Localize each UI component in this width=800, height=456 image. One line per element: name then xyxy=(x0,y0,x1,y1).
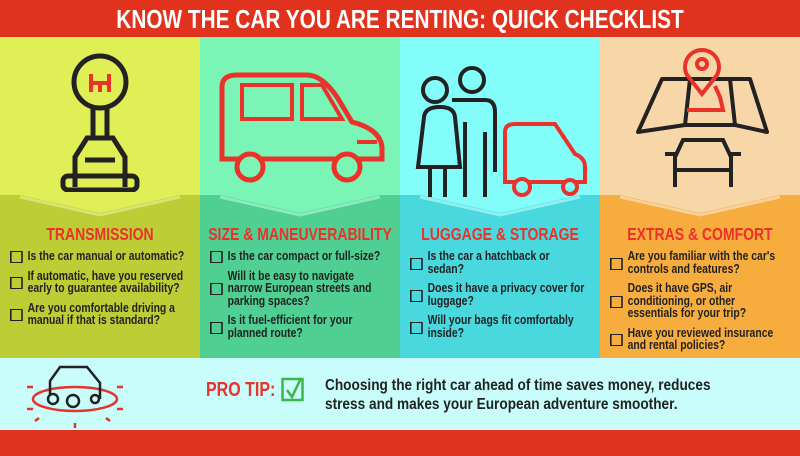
icon: van xyxy=(220,72,384,182)
tip text: stress and makes your European adventure smoother. xyxy=(325,396,677,413)
checklist: transmission: Are you comfortable driving a manual if that is standard? xyxy=(28,300,175,327)
checklist: extras: essentials for your trip? xyxy=(628,305,746,320)
title: KNOW THE CAR YOU ARE RENTING: QUICK CHECKLIST xyxy=(116,4,684,34)
panel: extras xyxy=(600,37,800,358)
checklist: luggage: Is the car a hatchback or sedan? xyxy=(428,248,550,276)
checklist: transmission xyxy=(10,248,184,327)
icon: map and car xyxy=(636,48,770,187)
tip text: Choosing the right car ahead of time saves money, reduces xyxy=(325,377,711,394)
checklist: extras: conditioning, or other xyxy=(628,292,735,308)
icon: green check xyxy=(281,378,304,402)
panel: transmission xyxy=(0,37,200,358)
icon: car on spot xyxy=(27,366,123,428)
icon: people and car xyxy=(416,66,587,197)
icon: gear shifter xyxy=(60,54,140,192)
heading: extras: EXTRAS & COMFORT xyxy=(627,224,773,244)
heading: transmission: TRANSMISSION xyxy=(46,224,154,244)
checklist: size: Will it be easy to navigate narrow European streets and parking spaces? xyxy=(228,268,372,308)
checklist: transmission: Is the car manual or automatic? xyxy=(28,248,184,263)
tip text xyxy=(325,377,711,413)
checklist: size: Is it fuel-efficient for your planned route? xyxy=(228,312,352,340)
checklist: extras: Have you reviewed insurance and rental policies? xyxy=(628,324,773,352)
panel: luggage xyxy=(400,37,600,358)
checklist: size xyxy=(210,248,380,340)
heading: size: SIZE & MANEUVERABILITY xyxy=(208,224,392,244)
checklist: size: Is the car compact or full-size? xyxy=(228,248,380,263)
checklist: extras: Are you familiar with the car's controls and features? xyxy=(628,248,775,276)
checklist: luggage xyxy=(410,248,584,340)
panel: pro tip xyxy=(0,358,800,430)
checklist: luggage: Does it have a privacy cover for luggage? xyxy=(428,280,584,308)
checklist: transmission: If automatic, have you reserved early to guarantee availability? xyxy=(28,268,183,295)
checklist: extras: Does it have GPS, air xyxy=(628,280,732,295)
panel: size xyxy=(200,37,400,358)
heading: luggage: LUGGAGE & STORAGE xyxy=(421,224,579,244)
checklist: luggage: Will your bags fit comfortably inside? xyxy=(428,312,574,340)
checklist: extras xyxy=(610,248,775,352)
label: pro tip: PRO TIP: xyxy=(206,379,275,401)
